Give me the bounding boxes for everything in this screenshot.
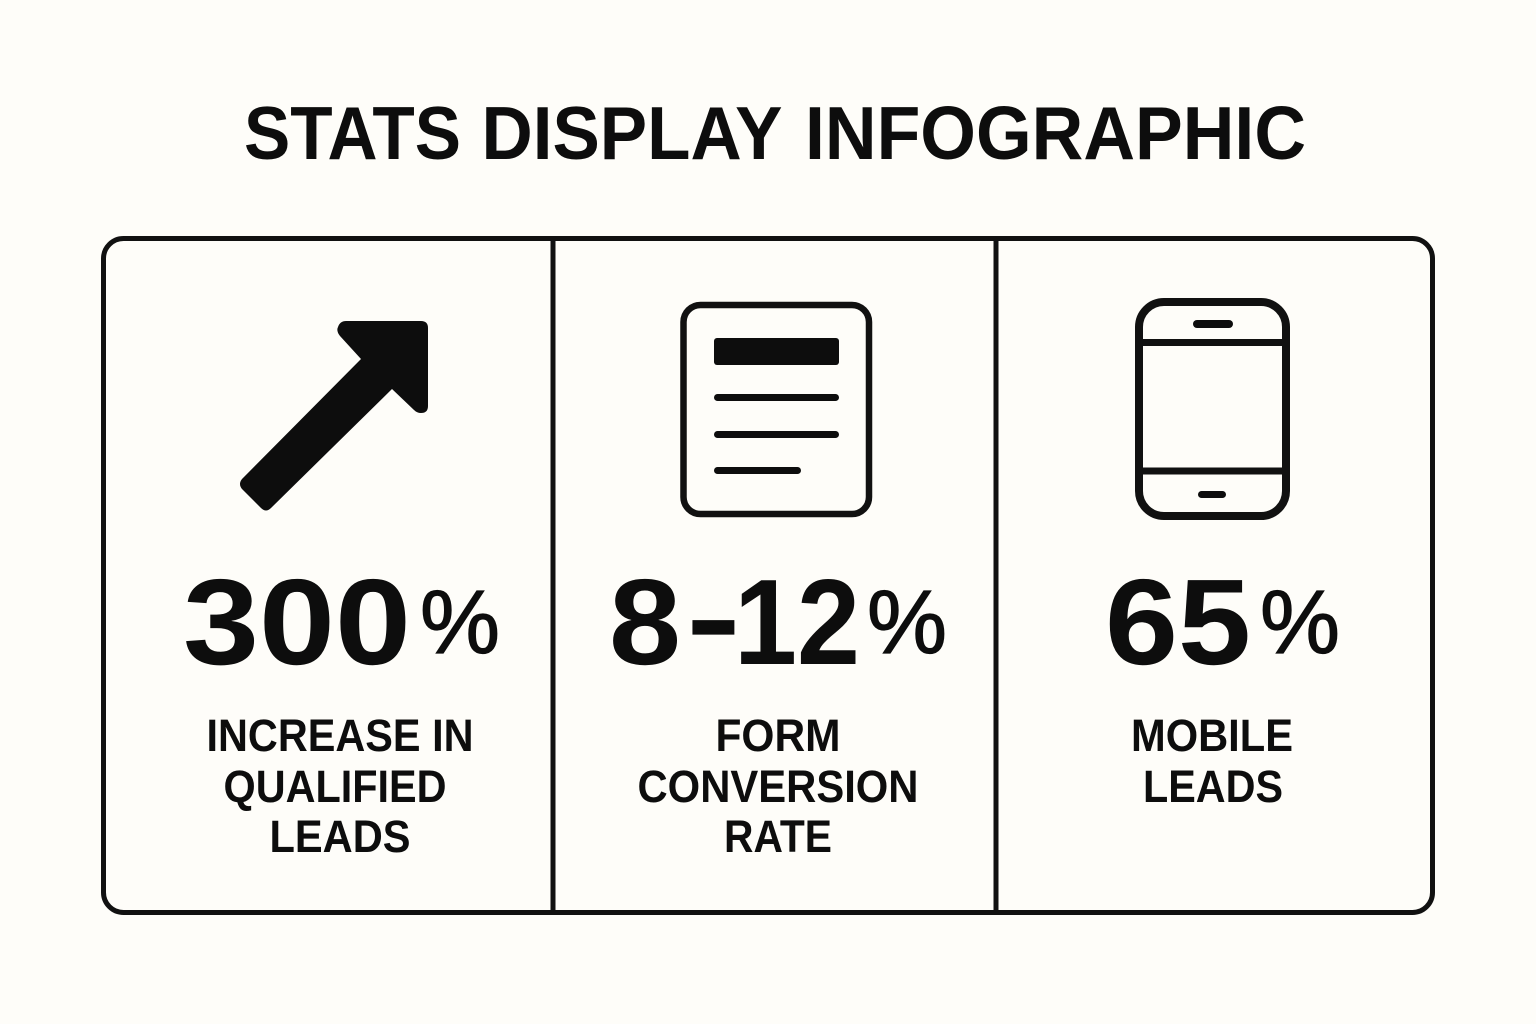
title	[244, 91, 1306, 175]
label: mobile leads: MOBILE	[1131, 710, 1293, 761]
stat: 300%	[183, 554, 500, 690]
label: mobile leads: LEADS	[1143, 761, 1283, 812]
panel: mobile leads	[1105, 302, 1340, 812]
label: mobile leads	[1131, 710, 1293, 812]
icon: up-right arrow	[240, 321, 428, 510]
title: INFOGRAPHIC	[805, 91, 1306, 175]
stat: 300%: %	[420, 573, 500, 673]
label: increase in qualified leads	[206, 710, 474, 862]
label: increase in qualified leads: LEADS	[270, 811, 410, 862]
stat: 65%: 65	[1105, 554, 1251, 690]
stat: 8-12%: 8	[609, 554, 681, 690]
title: DISPLAY	[482, 91, 782, 175]
label: increase in qualified leads: QUALIFIED	[224, 761, 446, 812]
label: form conversion rate: RATE	[724, 811, 832, 862]
stat: 8-12%: 12	[734, 554, 860, 690]
stat: 65%	[1105, 554, 1340, 690]
label: form conversion rate	[638, 710, 918, 862]
label: increase in qualified leads: INCREASE IN	[206, 710, 474, 761]
label: form conversion rate: FORM	[716, 710, 840, 761]
icon: form document	[684, 305, 869, 514]
stat: 8-12%: -	[686, 549, 741, 685]
stats frame	[104, 238, 1432, 912]
panel: qualified leads	[183, 321, 500, 862]
stat: 8-12%	[609, 549, 947, 690]
title: STATS	[244, 91, 461, 175]
icon: mobile phone	[1139, 302, 1286, 516]
stat: 65%: %	[1260, 573, 1340, 673]
stat: 300%: 300	[183, 554, 411, 690]
panel: form conversion	[609, 305, 947, 862]
stat: 8-12%: %	[867, 573, 947, 673]
label: form conversion rate: CONVERSION	[638, 761, 918, 812]
